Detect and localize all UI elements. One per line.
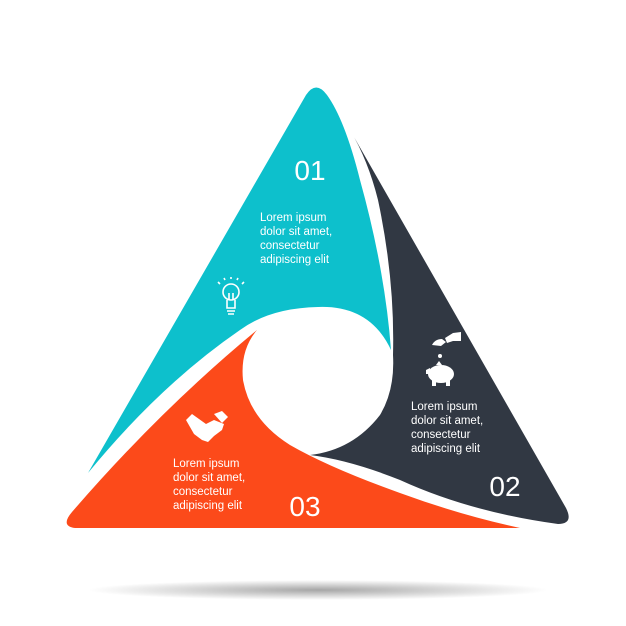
text 01: dolor sit amet, bbox=[260, 226, 332, 238]
text 01 bbox=[260, 212, 332, 266]
text 01: consectetur bbox=[260, 240, 320, 252]
shadow bbox=[88, 580, 548, 600]
icon: handshake bbox=[186, 411, 228, 442]
icon: hand & piggy bank bbox=[426, 332, 461, 386]
text 03 bbox=[173, 458, 245, 512]
number 01: 01 bbox=[294, 155, 326, 186]
text 03: dolor sit amet, bbox=[173, 472, 245, 484]
text 02: consectetur bbox=[411, 429, 471, 441]
text 02: adipiscing elit bbox=[411, 443, 481, 455]
text 01: Lorem ipsum bbox=[260, 212, 326, 224]
text 02: Lorem ipsum bbox=[411, 401, 477, 413]
panel: 01 teal bbox=[88, 88, 391, 473]
text 02 bbox=[411, 401, 483, 455]
icon: lightbulb bbox=[218, 277, 244, 314]
text 02: dolor sit amet, bbox=[411, 415, 483, 427]
number 03: 03 bbox=[289, 491, 321, 522]
panel: 02 dark bbox=[310, 130, 569, 524]
text 03: Lorem ipsum bbox=[173, 458, 239, 470]
panel: 03 orange bbox=[67, 330, 520, 528]
text 01: adipiscing elit bbox=[260, 254, 330, 266]
number 02: 02 bbox=[489, 471, 521, 502]
text 03: adipiscing elit bbox=[173, 500, 243, 512]
text 03: consectetur bbox=[173, 486, 233, 498]
